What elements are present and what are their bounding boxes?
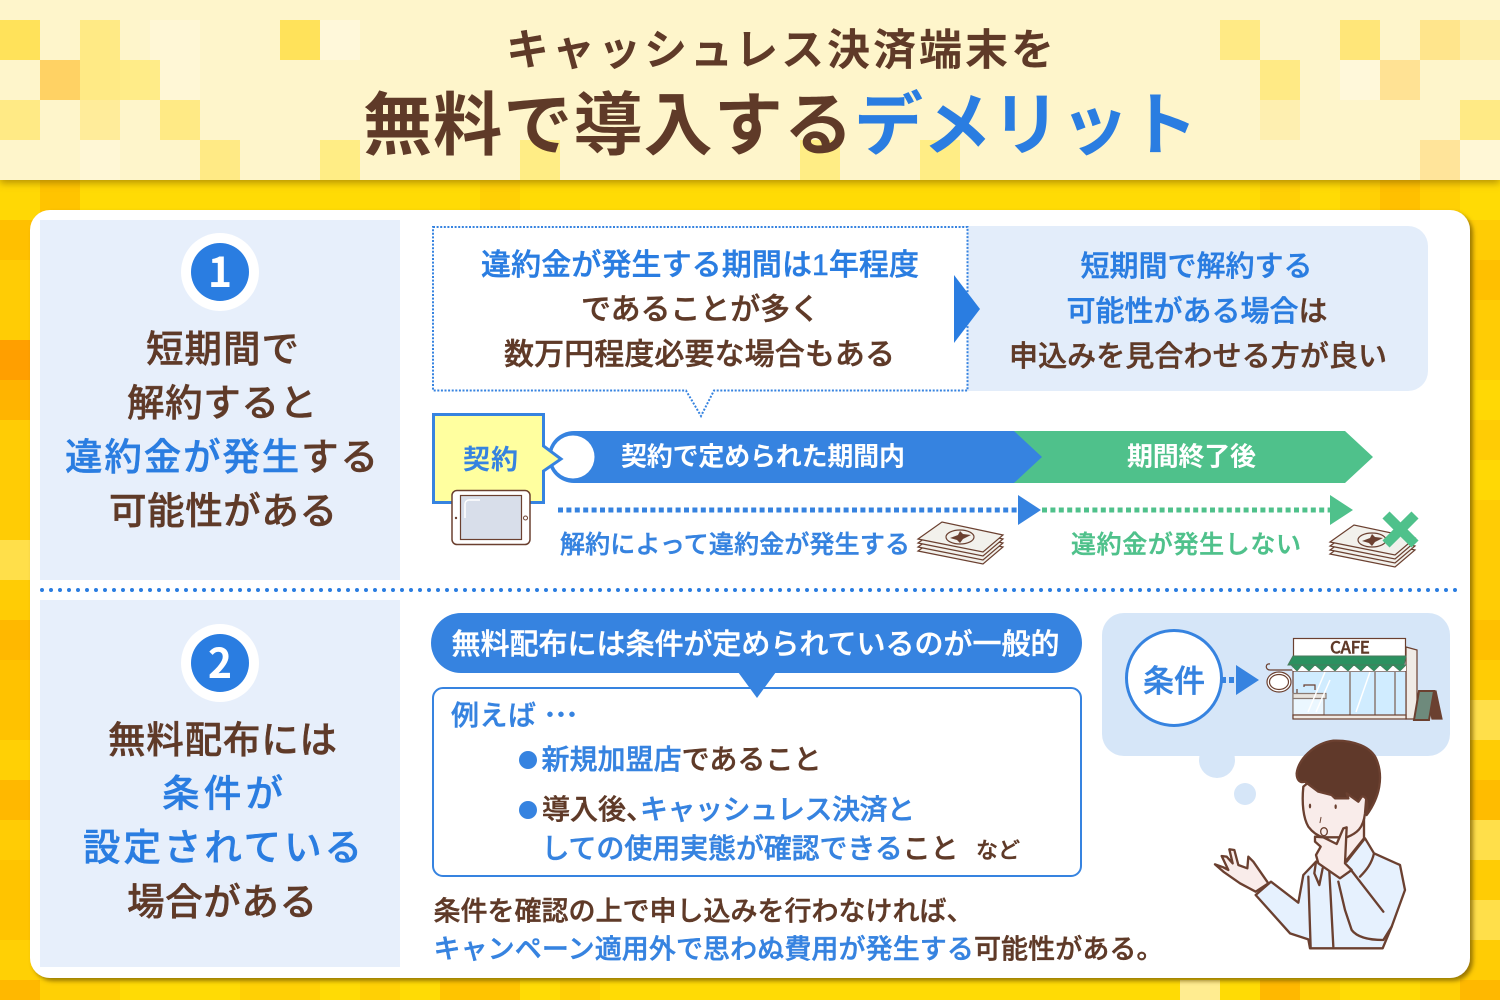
icon: number 2 xyxy=(181,624,259,702)
timeline bars xyxy=(548,431,1373,483)
point 1 text: 短期間で xyxy=(146,328,299,370)
headline pill: 無料配布には条件が定められているのが一般的 xyxy=(452,628,1060,661)
advice text xyxy=(1009,250,1387,373)
callout: cancellation fee period: 数万円程度必要な場合もある xyxy=(504,338,895,372)
icon: thinking man xyxy=(1215,741,1405,948)
text: for example xyxy=(451,700,579,731)
thought bubble xyxy=(1102,613,1450,805)
bullet 2: 導入後、 xyxy=(542,794,654,825)
label: fee applies: 解約によって違約金が発生する xyxy=(560,531,910,559)
face xyxy=(1303,770,1367,837)
point 2 text: 設定されている xyxy=(83,826,362,868)
shirt lines xyxy=(1308,853,1392,948)
example box xyxy=(433,688,1081,876)
hair xyxy=(1297,741,1380,815)
panel: point 2 heading xyxy=(40,600,400,967)
conclusion text xyxy=(434,896,1164,964)
contract label box: 契約 xyxy=(463,445,518,475)
callout: cancellation fee period: 違約金が発生する期間は1年程度 xyxy=(481,249,919,282)
arrow: condition to cafe xyxy=(1221,665,1259,695)
panel: short-term advice xyxy=(960,226,1428,391)
point 1 text: 解約すると xyxy=(127,382,317,424)
title line 2: デメリット xyxy=(854,87,1198,164)
text: for example: ･･･ xyxy=(543,700,579,731)
bar: after period: 期間終了後 xyxy=(1127,442,1256,472)
shirt xyxy=(1256,838,1405,948)
icon: number 2: 2 xyxy=(208,630,232,690)
icon: tablet xyxy=(452,490,530,544)
bullet 2: キャッシュレス決済と xyxy=(640,794,915,825)
point 2 text xyxy=(83,719,362,923)
title line 2: 無料で導入する xyxy=(363,87,853,164)
point 2 text: 場合がある xyxy=(127,881,317,923)
bullet 2: など xyxy=(976,838,1020,863)
condition circle xyxy=(1126,630,1222,726)
panel: point 1 heading xyxy=(40,220,400,580)
bullet 1: 新規加盟店であること xyxy=(542,744,822,775)
point 2 text: 無料配布には xyxy=(108,719,337,761)
icon: banknotes crossed xyxy=(1330,515,1415,567)
icon: cafe xyxy=(1266,634,1442,720)
left hand xyxy=(1215,849,1268,892)
advice text: 可能性がある場合は xyxy=(1066,295,1328,328)
neck xyxy=(1333,823,1364,863)
dotted arrow: fee applies xyxy=(558,495,1041,525)
white card xyxy=(30,210,1470,978)
advice text: 申込みを見合わせる方が良い xyxy=(1009,340,1387,373)
bullet 2 xyxy=(519,794,1020,864)
point 1 text: 可能性がある xyxy=(109,490,337,532)
bar: contract period: 契約で定められた期間内 xyxy=(621,442,905,472)
contract label box xyxy=(434,414,561,502)
dotted arrow: no fee xyxy=(1042,495,1353,525)
icon: number 1 xyxy=(181,233,259,311)
arrow: to advice xyxy=(954,275,980,343)
callout: cancellation fee period: であることが多く xyxy=(581,294,820,326)
title line 1: キャッシュレス決済端末を xyxy=(506,27,1054,75)
bar: contract period xyxy=(548,431,1042,483)
icon: banknotes xyxy=(918,522,1003,564)
bullet 2: しての使用実態が確認できること xyxy=(542,833,958,864)
title line 2 xyxy=(363,87,1198,164)
point 1 text: 違約金が発生する xyxy=(65,436,378,478)
headline pill xyxy=(431,613,1082,698)
point 1 text xyxy=(65,328,378,532)
conclusion text: 条件を確認の上で申し込みを行わなければ、 xyxy=(434,896,974,926)
icon: number 1: 1 xyxy=(208,239,232,299)
text: for example: 例えば xyxy=(451,700,536,731)
bar: after period xyxy=(1012,431,1373,483)
advice text: 短期間で解約する xyxy=(1080,250,1312,283)
point 2 text: 条件が xyxy=(162,772,283,814)
label: no fee: 違約金が発生しない xyxy=(1071,531,1301,559)
conclusion text: キャンペーン適用外で思わぬ費用が発生する可能性がある。 xyxy=(434,934,1164,964)
condition circle: 条件 xyxy=(1143,664,1205,699)
chin hand xyxy=(1315,827,1352,878)
icon: cafe: CAFE xyxy=(1330,634,1370,658)
header band xyxy=(0,0,1500,180)
callout: cancellation fee period xyxy=(433,227,968,416)
